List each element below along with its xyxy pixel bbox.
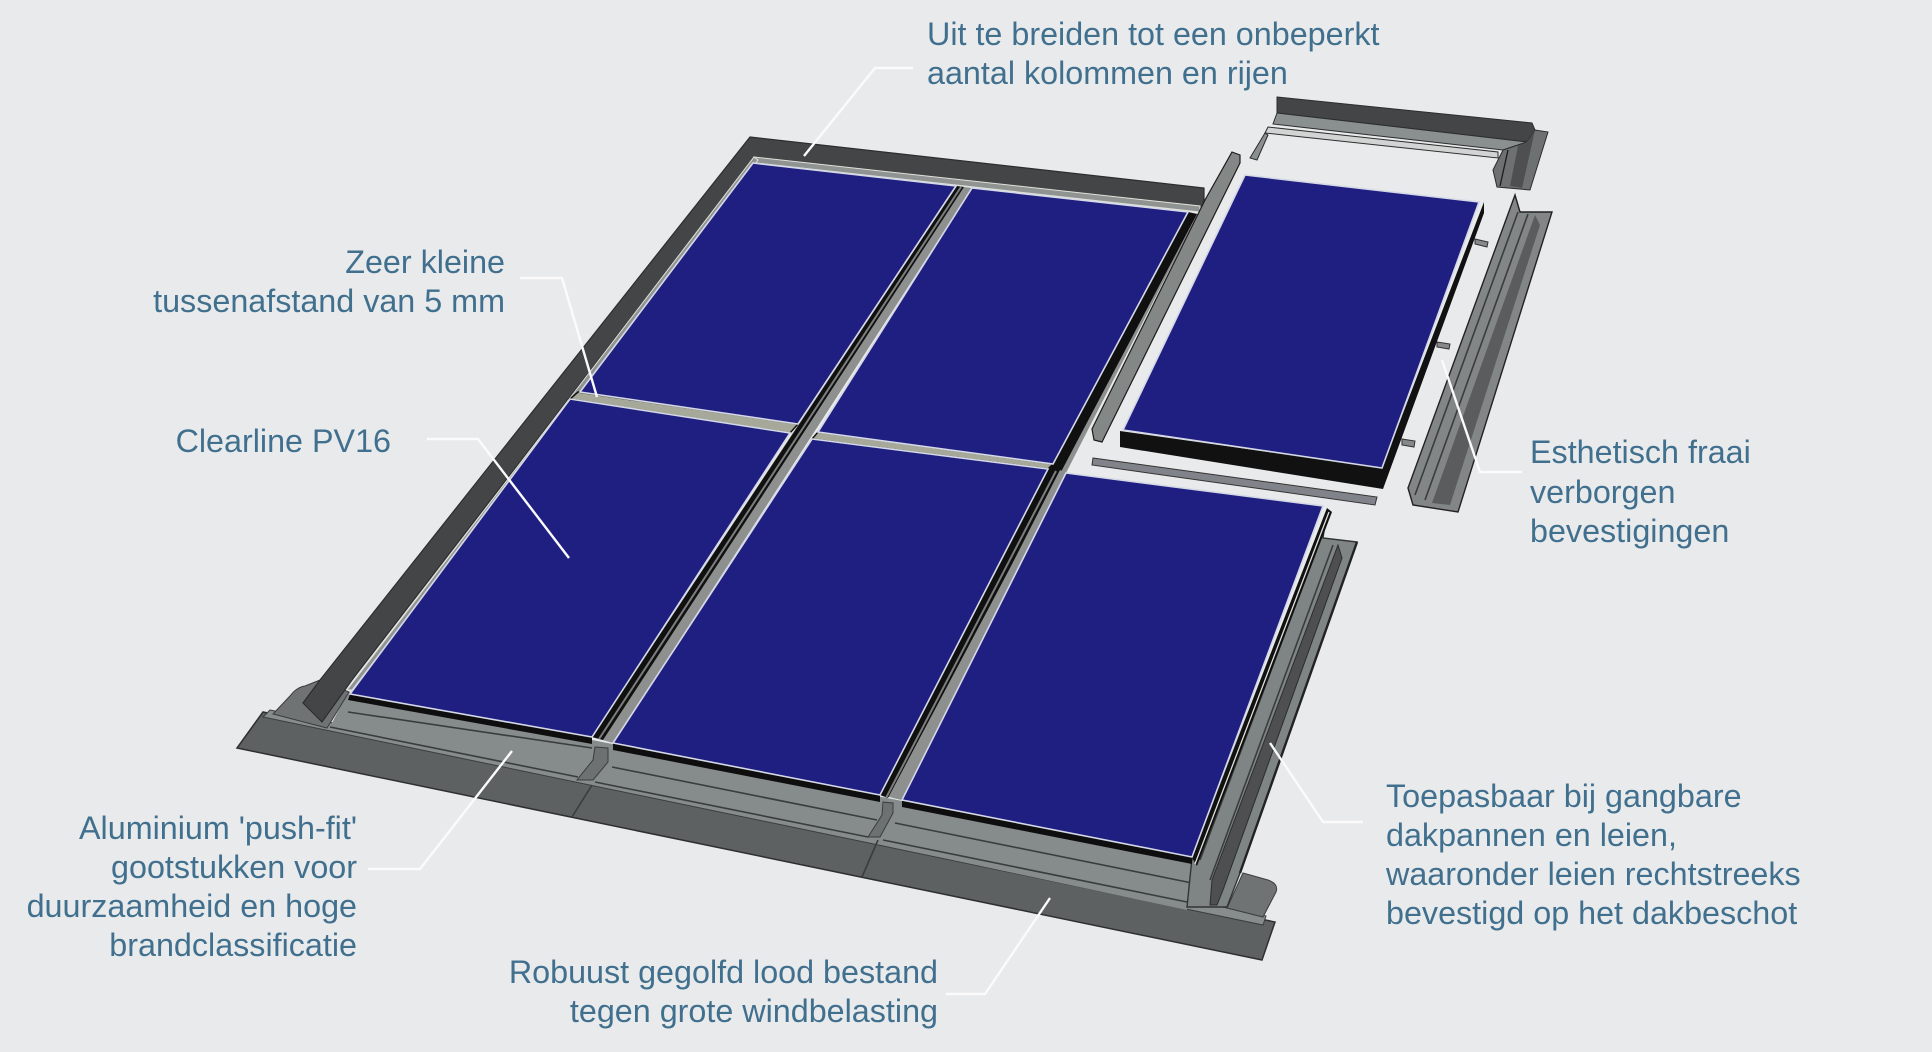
solar panel A bbox=[580, 163, 956, 424]
fixing tabs bbox=[1402, 239, 1488, 447]
callout: push-fit gutters: brandclassificatie bbox=[109, 927, 357, 963]
callout: hidden fixings bbox=[1442, 360, 1751, 549]
detached side flashing bbox=[1408, 195, 1552, 512]
callout: hidden fixings: bevestigingen bbox=[1530, 513, 1729, 549]
apron corner left bbox=[273, 680, 349, 728]
row gap strips bbox=[570, 392, 1053, 469]
callout: push-fit gutters bbox=[27, 751, 512, 963]
apron joint 1 bbox=[577, 747, 608, 780]
callout: corrugated lead: Robuust gegolfd lood bestand bbox=[509, 954, 938, 990]
callout: small spacing: tussenafstand van 5 mm bbox=[153, 283, 505, 319]
callout: roof types: bevestigd op het dakbeschot bbox=[1386, 895, 1797, 931]
callout: expandable: Uit te breiden tot een onbeperkt bbox=[927, 16, 1379, 52]
callout: push-fit gutters: duurzaamheid en hoge bbox=[27, 888, 357, 924]
detached panel frame bbox=[1120, 202, 1484, 489]
left inner strip bbox=[347, 157, 758, 690]
panel bottom shadow rails bbox=[348, 694, 1192, 864]
apron corner right bbox=[1227, 873, 1277, 917]
solar panel F bbox=[902, 473, 1323, 857]
callout: small spacing: Zeer kleine bbox=[345, 244, 505, 280]
top inner strip bbox=[754, 157, 1200, 212]
solar panel D bbox=[350, 399, 790, 737]
solar panel E bbox=[613, 439, 1048, 795]
lead apron bbox=[237, 692, 1275, 960]
callout: push-fit gutters: Aluminium 'push-fit' bbox=[79, 810, 357, 846]
callout: expandable: aantal kolommen en rijen bbox=[927, 55, 1288, 91]
callout: corrugated lead: tegen grote windbelasting bbox=[570, 993, 938, 1029]
callout: roof types: waaronder leien rechtstreeks bbox=[1385, 856, 1801, 892]
detached left strip bbox=[1092, 152, 1240, 442]
detached top flashing bbox=[1250, 97, 1548, 190]
callout: hidden fixings: Esthetisch fraai bbox=[1530, 434, 1751, 470]
right flashing bbox=[1187, 510, 1357, 907]
callout: corrugated lead bbox=[509, 898, 1050, 1029]
roof assembly illustration bbox=[237, 97, 1552, 960]
solar panel B bbox=[818, 188, 1188, 464]
callout: expandable bbox=[804, 16, 1379, 156]
callout: product bbox=[176, 423, 569, 558]
callout: hidden fixings: verborgen bbox=[1530, 474, 1675, 510]
detached solar panel C bbox=[1123, 175, 1479, 468]
top and left flashing bbox=[303, 137, 1204, 722]
callout: roof types bbox=[1270, 743, 1801, 931]
callout: roof types: Toepasbaar bij gangbare bbox=[1386, 778, 1742, 814]
column gap strips bbox=[592, 186, 1332, 866]
callout: small spacing bbox=[153, 244, 597, 397]
callout: roof types: dakpannen en leien, bbox=[1386, 817, 1677, 853]
callout: push-fit gutters: gootstukken voor bbox=[111, 849, 357, 885]
detached bottom strip bbox=[1092, 458, 1377, 505]
callout: product: Clearline PV16 bbox=[176, 423, 391, 459]
apron joint 2 bbox=[868, 802, 893, 837]
